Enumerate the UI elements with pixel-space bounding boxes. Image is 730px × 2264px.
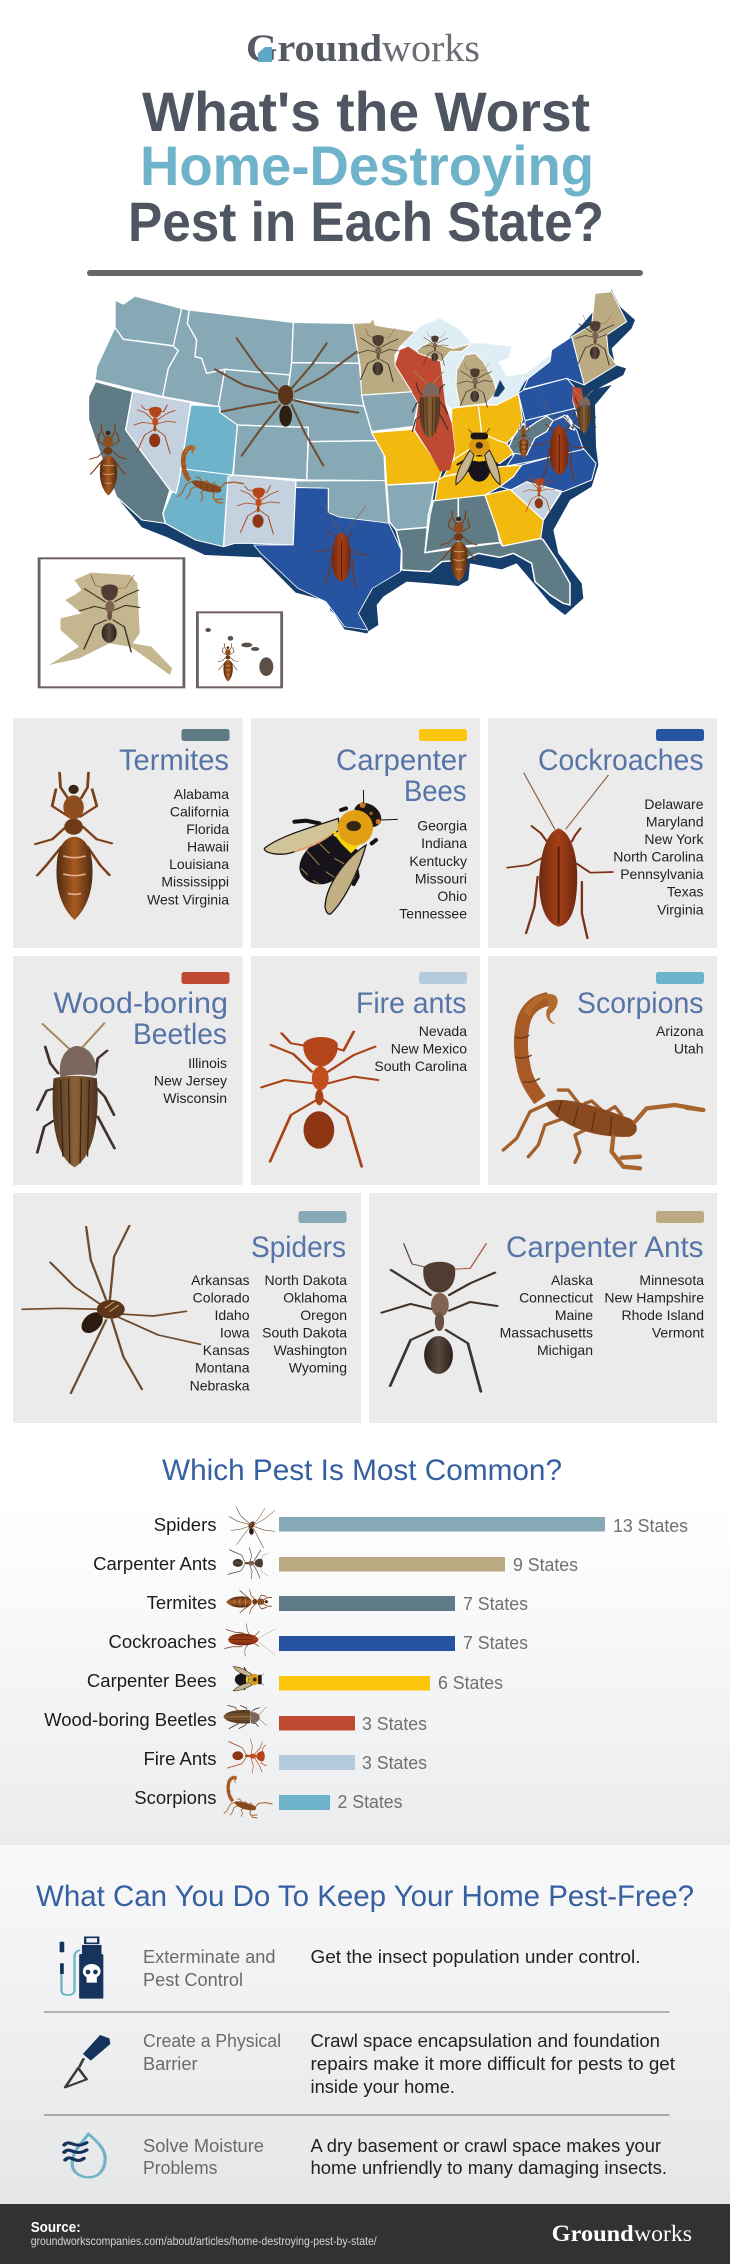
panel: wood-boring beetles — [13, 956, 242, 1185]
panel: termites: Louisiana — [169, 856, 229, 872]
row: termites — [147, 1590, 528, 1614]
panel: termites: West Virginia — [147, 891, 229, 907]
Michigan extrusion — [493, 380, 505, 397]
footer — [0, 2204, 730, 2264]
pest on Minnesota: carpenter ant — [357, 328, 399, 382]
row: spiders: 13 States — [613, 1516, 688, 1536]
row: spiders — [154, 1491, 688, 1559]
panel: termites: Hawaii — [187, 839, 229, 855]
panel: cockroaches: Cockroaches — [538, 744, 704, 777]
panel: scorpions — [488, 956, 717, 1185]
panel: spiders: Iowa — [220, 1325, 250, 1341]
row: wood-boring beetles: Wood-boring Beetles — [44, 1709, 216, 1730]
row: wood-boring beetles: 3 States — [362, 1714, 427, 1734]
icon: water drop with waves — [64, 2134, 105, 2177]
chart section background — [0, 1500, 730, 1845]
panel: termites: Mississippi — [161, 874, 229, 890]
pest on Nevada: fire ant — [134, 405, 176, 454]
panel: fire ants: New Mexico — [391, 1040, 467, 1056]
row: carpenter ants: Carpenter Ants — [93, 1553, 216, 1574]
carpenter bee states — [372, 394, 543, 546]
footer logo: Ground — [552, 2221, 634, 2246]
panel: carpenter bees: Ohio — [437, 888, 467, 904]
eastern termite states — [396, 416, 570, 605]
row: scorpions: 2 States — [338, 1792, 402, 1812]
panel: cockroaches — [488, 718, 717, 948]
pest on Texas: cockroach — [316, 504, 368, 587]
row: carpenter ants — [93, 1548, 578, 1579]
panel: carpenter bees: Kentucky — [409, 853, 467, 869]
pest on lower Michigan: carpenter ant — [458, 363, 492, 407]
panel: carpenter ants: Massachusetts — [500, 1325, 593, 1341]
heading: which pest is most common: Which Pest Is Most Common? — [162, 1454, 562, 1487]
row: scorpions — [134, 1776, 402, 1818]
source text: Source: — [31, 2219, 81, 2236]
row: wood-boring beetles — [44, 1705, 427, 1734]
tip row: exterminate — [60, 1937, 641, 1999]
panel: cockroaches: New York — [644, 831, 704, 847]
icon: sprayer with skull — [60, 1937, 103, 1999]
logo: Groundworks: works — [382, 27, 480, 70]
eastern fire ant state — [511, 482, 562, 520]
panel: termites: Termites — [119, 744, 229, 777]
panel: spiders: Oklahoma — [283, 1290, 347, 1306]
row: spiders: Spiders — [154, 1514, 216, 1535]
panel: spiders: Colorado — [193, 1290, 250, 1306]
tip row: moisture: Solve Moisture — [143, 2136, 264, 2156]
tip row: physical barrier — [65, 2031, 675, 2097]
panel: carpenter ants: Vermont — [652, 1325, 704, 1341]
panel: scorpions: Arizona — [656, 1023, 704, 1039]
title: Pest in Each State? — [128, 190, 604, 253]
row: fire ants: Fire Ants — [144, 1748, 216, 1769]
panel: wood-boring beetles: Beetles — [133, 1018, 227, 1051]
pest on New Jersey: beetle — [573, 390, 596, 433]
panel: spiders: Oregon — [300, 1307, 347, 1323]
pest on West Virginia: termite — [514, 422, 533, 458]
panel: wood-boring beetles: Wood-boring — [54, 987, 228, 1020]
panel: carpenter ants: Carpenter Ants — [506, 1231, 704, 1264]
row: cockroaches: 7 States — [463, 1633, 528, 1653]
row: carpenter bees: Carpenter Bees — [87, 1670, 216, 1691]
footer logo: works — [634, 2221, 692, 2246]
panel: spiders: Nebraska — [190, 1377, 250, 1393]
panel: termites — [13, 718, 242, 948]
row: termites: 7 States — [463, 1594, 528, 1614]
logo: Groundworks: Ground — [246, 27, 382, 70]
panel: carpenter bees: Missouri — [415, 870, 467, 886]
panel: carpenter ants — [369, 1193, 717, 1423]
panel: spiders: North Dakota — [265, 1272, 347, 1288]
tip row: exterminate: Get the insect population under control. — [310, 1947, 640, 1967]
panel: fire ants: South Carolina — [374, 1058, 467, 1074]
panel: carpenter ants: Alaska — [551, 1272, 593, 1288]
tip row: physical barrier: Create a Physical — [143, 2031, 281, 2051]
title: Home-Destroying — [140, 134, 594, 197]
tip row: exterminate: Exterminate and — [143, 1947, 276, 1967]
panel: fire ants: Fire ants — [356, 987, 466, 1020]
tips section background — [0, 1845, 730, 2204]
tip row: physical barrier: Crawl space encapsulation and foundation — [310, 2031, 660, 2051]
panel: fire ants: Nevada — [419, 1023, 467, 1039]
panel: carpenter ants: Rhode Island — [621, 1307, 704, 1323]
row: carpenter bees — [87, 1667, 503, 1693]
panel: cockroaches: Texas — [667, 884, 704, 900]
panel: cockroaches: Pennsylvania — [620, 866, 704, 882]
row: carpenter ants: 9 States — [513, 1555, 578, 1575]
panel: carpenter ants: Maine — [555, 1307, 593, 1323]
panel: carpenter bees: Bees — [404, 775, 466, 808]
inset and pest layer — [39, 315, 615, 687]
row: fire ants — [144, 1739, 427, 1773]
tip row: moisture: home unfriendly to many damaging insects. — [310, 2158, 667, 2178]
pest on the plains: spider — [215, 338, 358, 466]
eastern cockroach states — [500, 337, 596, 492]
panel: cockroaches: Delaware — [644, 796, 704, 812]
icon: trowel — [65, 2035, 110, 2087]
panel: carpenter bees: Carpenter — [336, 744, 467, 777]
great lakes — [402, 318, 553, 408]
panel: carpenter bees: Indiana — [421, 835, 467, 851]
eastern states — [353, 292, 627, 605]
panel: fire ants — [251, 956, 480, 1185]
logo: Groundworks — [246, 27, 480, 70]
panel: scorpions: Scorpions — [577, 987, 704, 1020]
row: termites: Termites — [147, 1592, 216, 1613]
pest on California: termite — [90, 425, 126, 496]
panel: cockroaches: Maryland — [646, 814, 704, 830]
map extrusion shadow — [116, 290, 635, 633]
inset: Hawaii — [197, 612, 282, 687]
source text: groundworkscompanies.com/about/articles/home-destroying-pest-by-state/ — [31, 2234, 377, 2248]
panel: spiders: South Dakota — [262, 1325, 347, 1341]
heading: what can you do: What Can You Do To Keep Your Home Pest-Free? — [36, 1880, 694, 1913]
row: fire ants: 3 States — [362, 1753, 427, 1773]
inset: Alaska — [39, 558, 184, 687]
pest on New Mexico: fire ant — [237, 486, 279, 534]
panel: spiders — [13, 1193, 361, 1423]
panel: spiders: Washington — [274, 1342, 347, 1358]
footer logo — [552, 2221, 692, 2246]
pest on Mississippi: termite — [440, 511, 477, 582]
panel: carpenter ants: Connecticut — [519, 1290, 593, 1306]
panel: termites: Alabama — [174, 786, 229, 802]
panel: wood-boring beetles: Illinois — [188, 1055, 227, 1071]
panel: scorpions: Utah — [674, 1040, 704, 1056]
row: carpenter bees: 6 States — [438, 1673, 503, 1693]
panel: cockroaches: North Carolina — [613, 849, 704, 865]
panel: carpenter ants: Michigan — [537, 1342, 593, 1358]
panel: spiders: Spiders — [251, 1231, 346, 1264]
row: scorpions: Scorpions — [134, 1787, 216, 1808]
panel: carpenter bees: Tennessee — [399, 905, 467, 921]
row: cockroaches — [109, 1624, 528, 1656]
panel: spiders: Arkansas — [191, 1272, 250, 1288]
wood-boring beetle states — [395, 347, 583, 472]
tip row: physical barrier: inside your home. — [310, 2077, 455, 2097]
source text — [31, 2219, 377, 2248]
panel: carpenter ants: New Hampshire — [604, 1290, 704, 1306]
pest on Utah/Arizona: scorpion — [177, 445, 243, 503]
tip row: physical barrier: repairs make it more difficult for pests to get — [310, 2054, 675, 2074]
panel: cockroaches: Virginia — [657, 901, 704, 917]
pest on Virginia: cockroach — [534, 398, 586, 480]
pest on Illinois: beetle — [412, 372, 448, 438]
tip row: physical barrier: Barrier — [143, 2054, 198, 2074]
map of the United States — [39, 290, 635, 687]
Chesapeake inlet — [567, 415, 575, 430]
southern plains spider state and California — [88, 382, 401, 630]
panel: wood-boring beetles: New Jersey — [154, 1072, 227, 1088]
panel: spiders: Wyoming — [289, 1360, 347, 1376]
tip row: moisture: A dry basement or crawl space makes your — [310, 2136, 661, 2156]
panel: spiders: Kansas — [203, 1342, 250, 1358]
row: cockroaches: Cockroaches — [109, 1631, 216, 1652]
title: What's the Worst — [142, 80, 590, 143]
carpenter ant states — [353, 292, 627, 407]
tip row: moisture — [64, 2134, 667, 2178]
tip row: exterminate: Pest Control — [143, 1970, 243, 1990]
eastern spider states — [362, 392, 435, 530]
panel: carpenter bees — [251, 718, 480, 948]
bar chart: states per pest — [44, 1491, 688, 1818]
panel: carpenter ants: Minnesota — [639, 1272, 704, 1288]
panel: wood-boring beetles: Wisconsin — [163, 1090, 227, 1106]
panel: spiders: Montana — [195, 1360, 250, 1376]
panel: termites: Florida — [186, 821, 229, 837]
tip row: moisture: Problems — [143, 2158, 218, 2178]
panel: spiders: Idaho — [214, 1307, 250, 1323]
pest on South Carolina: fire ant — [523, 477, 555, 513]
pest on upper Michigan: carpenter ant — [422, 331, 448, 365]
title — [128, 80, 604, 253]
pest on Indiana region: carpenter bee — [456, 428, 500, 485]
western spider states — [95, 296, 385, 481]
panel: carpenter bees: Georgia — [417, 818, 467, 834]
panel: termites: California — [170, 804, 229, 820]
pest on New England: carpenter ant — [576, 315, 615, 365]
